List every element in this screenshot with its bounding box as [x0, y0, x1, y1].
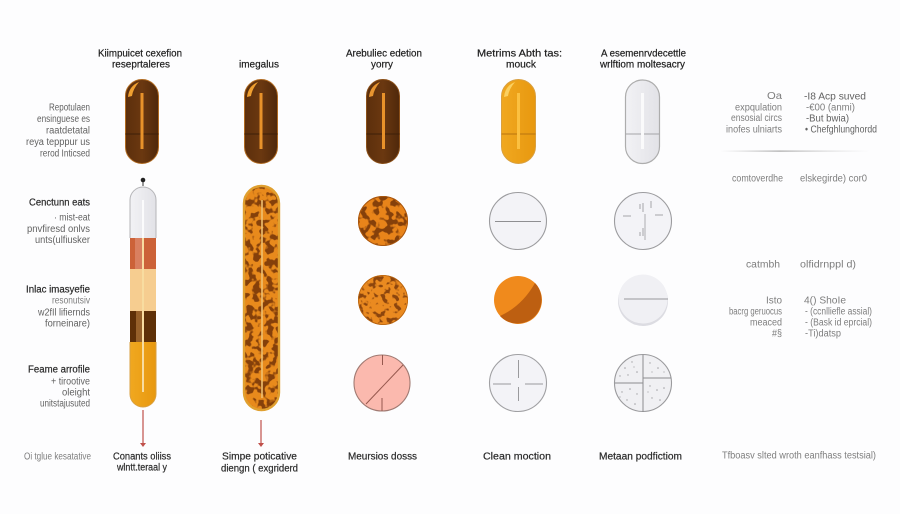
tablet: white embossed top — [614, 192, 672, 250]
left label: block 4: + tirootive — [51, 376, 90, 388]
tablet: white scored plain — [618, 274, 668, 326]
left label: block 3: resonutsiv — [52, 296, 90, 306]
arrow: tube 2 — [258, 420, 264, 447]
left label: block 3: w2fIl lifiernds — [37, 308, 90, 318]
caption: column 1: Conants oliiss — [113, 452, 171, 462]
arrow: tube 1 — [140, 410, 146, 447]
left label: block 3: forneinare) — [45, 318, 90, 330]
caption: column 3: Meursios dosss — [348, 452, 417, 462]
heading: column 3 — [346, 48, 422, 70]
caption: column 1 — [113, 452, 171, 474]
left label: capsule row: Repotulaen — [49, 102, 90, 114]
left label: capsule row: reya tepppur us — [26, 137, 90, 148]
heading: column 5 — [599, 48, 686, 70]
right notes: top block: expqulation — [735, 102, 782, 114]
tablet: orange granules top — [358, 196, 408, 246]
left label: block 2: unts(ulfiusker — [35, 235, 91, 246]
caption: right note: Tfboasv slted wroth eanfhass testsial) — [722, 450, 876, 462]
column headings — [98, 48, 686, 70]
left label: block 4: oleight — [62, 388, 90, 398]
right notes: row 3: catmbh — [746, 260, 780, 270]
left label: capsule row — [26, 102, 90, 160]
left label: block 2: Cenctunn eats — [29, 198, 90, 208]
caption: column 4: Clean moction — [483, 452, 551, 462]
heading: column 4 — [477, 48, 562, 70]
right notes: top block: • Chefghlunghordd — [805, 124, 877, 136]
left label: capsule row: ensinguese es — [37, 114, 90, 125]
right notes: row 4: -Ti)datsp — [805, 328, 841, 340]
left label: block 2 — [27, 198, 91, 246]
tablet: orange granules middle — [358, 275, 408, 325]
right notes: top block: -€00 (anmi) — [806, 102, 855, 114]
caption: column 2 — [221, 452, 298, 474]
right notes: row 4: Isto — [766, 296, 782, 306]
right notes: row 4: bacrg geruocus — [729, 306, 782, 318]
tablet: white scored top — [490, 192, 546, 250]
heading: column 5: wrlftiom moltesacry — [599, 58, 686, 70]
right notes: row 4: #§ — [772, 328, 782, 340]
left label: block 4: Feame arrofile — [28, 364, 90, 376]
bottom row captions — [24, 450, 876, 474]
heading: column 4: mouck — [506, 58, 537, 70]
right notes: row 4: - (Bask id eprcial) — [805, 318, 872, 328]
heading: column 4: Metrims Abth tas: — [477, 48, 562, 60]
infographic — [24, 48, 876, 474]
caption: column 2: Simpe poticative — [222, 452, 297, 462]
capsule 1: dark brown — [126, 80, 158, 164]
right notes: row 3: olfidrnppl d) — [800, 260, 856, 270]
left label: capsule row: rerod Inticsed — [40, 148, 90, 160]
caption: column 2: diengn ( exgriderd — [221, 464, 298, 474]
caption: row label: Oi tglue kesatative — [24, 452, 91, 462]
tablet: speckled quarters — [614, 354, 672, 412]
icon: top pin — [141, 178, 145, 186]
right notes: row 4: - (ccnlliefle assial) — [805, 306, 872, 318]
right notes: top block: ensosial circs — [731, 113, 782, 124]
right notes: row 4: 4() ShoIe — [804, 296, 846, 306]
heading: column 1: Kiimpuicet cexefion — [98, 48, 182, 60]
right notes: top block: Oa — [767, 91, 782, 102]
tablet: orange split — [494, 276, 542, 324]
right notes: row 4: meaced — [750, 318, 782, 328]
heading: column 3: Arebuliec edetion — [346, 48, 422, 60]
left label: block 4 — [28, 364, 90, 410]
heading: column 1: reseprtaleres — [112, 58, 170, 70]
left label: capsule row: raatdetatal — [46, 126, 90, 136]
heading: column 5: A esemenrvdecettle — [601, 48, 686, 60]
left label: block 3: Inlac imasyefie — [26, 284, 90, 296]
tube 2: granule-filled capsule — [244, 186, 279, 410]
tube 1: layered capsule — [130, 178, 156, 407]
heading: column 2: imegalus — [239, 58, 279, 70]
tablet: pink scored — [354, 355, 410, 411]
capsule 4: amber — [502, 80, 536, 164]
tablet: clean cross — [490, 354, 546, 412]
capsule 2: dark brown — [244, 80, 278, 164]
right notes: row 2: comtoverdhe — [732, 174, 783, 184]
capsule 5: white — [626, 80, 660, 164]
right notes: row 4 — [729, 296, 872, 340]
caption: column 1: wlntt.teraal y — [116, 462, 167, 474]
left label: block 3 — [26, 284, 90, 330]
left label: block 2: pnvfiresd onlvs — [27, 224, 90, 235]
right notes: row 3 — [746, 260, 856, 270]
right notes: row 2: elskegirde) cor0 — [800, 174, 867, 184]
caption: column 5: Metaan podfictiom — [599, 452, 682, 462]
right notes: top block: -I8 Acp suved — [804, 92, 866, 102]
left label: block 2: · mist-eat — [54, 212, 90, 224]
right notes: row 2 — [732, 174, 867, 184]
right notes: top block: inofes ulniarts — [726, 124, 782, 136]
heading: column 3: yorry — [371, 58, 394, 70]
right notes: top block — [726, 91, 877, 136]
heading: column 1 — [98, 48, 182, 70]
capsule 3: dark brown — [366, 80, 400, 164]
right notes: top block: -But bwia) — [806, 114, 849, 124]
left label: block 4: unitstajusuted — [40, 398, 90, 410]
